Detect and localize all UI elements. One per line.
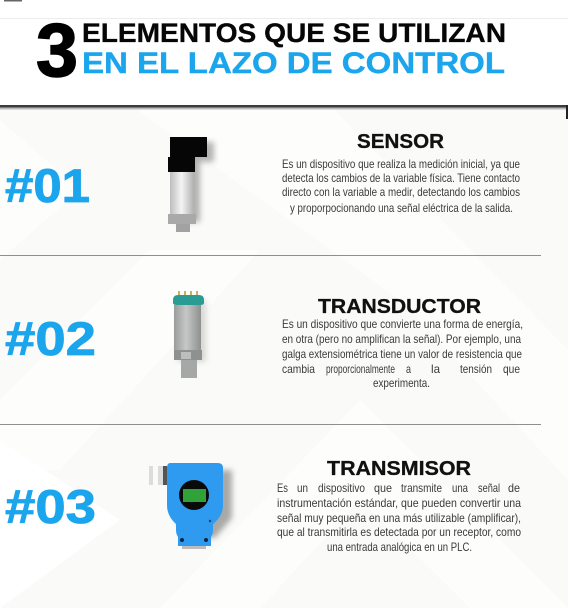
icon: transmitter device: [149, 463, 232, 549]
transmisor description: transmite: [401, 481, 442, 495]
transductor description: proporcionalmente: [326, 362, 395, 376]
sensor description: y proporpocionando una señal eléctrica de la salida.: [290, 201, 513, 215]
heading: transductor: TRANSDUCTOR: [318, 296, 482, 318]
transductor description: a: [406, 362, 411, 376]
transductor description: la: [431, 362, 440, 376]
transmisor description: que al transmitirla es detectada por un receptor, como: [277, 525, 521, 539]
transductor description: tensión: [460, 362, 492, 376]
icon: transducer device: [173, 291, 206, 378]
panel: transmisor: [5, 458, 521, 554]
title line 2: EN EL LAZO DE CONTROL: [82, 47, 505, 80]
transmisor description: un: [297, 481, 308, 495]
transductor description: en otra (pero no amplifican la señal). Por ejemplo, una: [282, 332, 521, 346]
transmisor description: dispositivo: [318, 481, 365, 495]
transductor description: Es un dispositivo que convierte una forma de energía,: [282, 317, 523, 331]
panel: transductor: [5, 291, 523, 390]
title: [36, 8, 506, 92]
transmisor description: señal muy pequeña en una más utilizable (amplificar),: [277, 511, 521, 525]
transductor description: galga extensiométrica tiene un valor de resistencia que: [282, 347, 522, 361]
heading: sensor: SENSOR: [357, 131, 445, 153]
title line 1: ELEMENTOS QUE SE UTILIZAN: [82, 18, 506, 48]
transmisor description: una: [452, 481, 468, 495]
transductor description: cambia: [282, 362, 315, 376]
transductor description: [282, 317, 523, 390]
transductor description: que: [503, 362, 520, 376]
transductor description: experimenta.: [373, 376, 430, 390]
transmisor description: [277, 481, 521, 554]
sensor description: directo con la variable a medir, detectando los cambios: [282, 185, 520, 199]
transmisor description: una entrada analógica en un PLC.: [327, 540, 472, 554]
transmisor description: instrumentación estándar, que pueden convertir una: [277, 496, 521, 510]
sensor description: [282, 157, 520, 215]
heading: transmisor: TRANSMISOR: [327, 458, 472, 480]
number 01: #01: [5, 159, 90, 212]
icon: sensor device: [168, 137, 214, 232]
panel: sensor: [5, 131, 520, 232]
transmisor description: que: [374, 481, 392, 495]
number 03: #03: [5, 480, 96, 533]
transmisor description: de: [508, 481, 520, 495]
sensor description: Es un dispositivo que realiza la medición inicial, ya que: [282, 157, 520, 171]
transmisor description: Es: [277, 481, 288, 495]
transmisor description: señal: [478, 481, 500, 495]
number 02: #02: [5, 312, 96, 365]
big number 3: 3: [36, 8, 78, 92]
page header background: [0, 0, 568, 105]
